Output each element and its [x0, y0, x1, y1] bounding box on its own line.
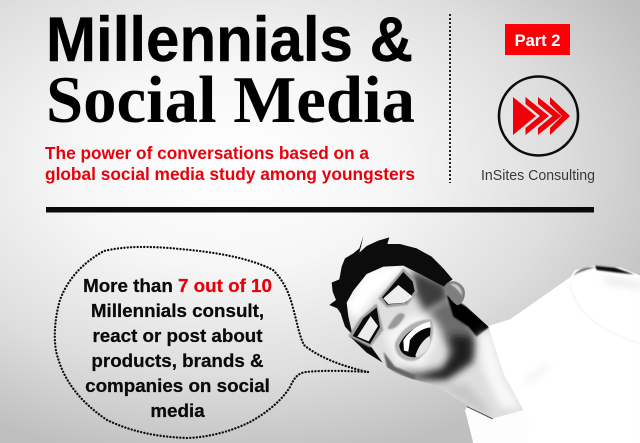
under-jaw dark wedge: [349, 336, 383, 363]
vertical dotted divider: [449, 14, 451, 183]
open mouth: [395, 319, 433, 361]
icon: circle with red chevrons: [499, 76, 578, 156]
horizontal rule: [46, 207, 594, 212]
upper lens reflection: [383, 285, 413, 304]
shirt: [465, 265, 640, 443]
beard along the jaw: [395, 335, 472, 381]
neck shading under the jaw: [442, 380, 489, 416]
bubble text: [83, 275, 272, 421]
cheek highlight: [383, 313, 437, 367]
neck shadow below the ear: [447, 295, 490, 337]
bubble text: Millennials consult,: [91, 300, 264, 321]
lower collar: [466, 407, 530, 443]
subtitle: global social media study among youngsters: [45, 164, 415, 184]
nose shadow: [387, 313, 405, 329]
temple shadow: [412, 270, 448, 312]
subtitle: [45, 143, 415, 184]
hair: [329, 236, 453, 335]
lower lens reflection: [357, 316, 378, 341]
forehead highlight: [347, 266, 406, 320]
bubble text: companies on social: [85, 375, 270, 396]
collar shadow line: [467, 407, 493, 419]
badge: Part 2: [505, 24, 570, 55]
bubble text: media: [150, 400, 205, 421]
sunglasses: [348, 268, 417, 347]
lower lens frame: [348, 303, 383, 347]
lower lens: [353, 307, 380, 344]
head and neck skin: [347, 266, 523, 418]
bubble text: products, brands &: [91, 350, 264, 371]
title: Millennials &: [46, 5, 413, 75]
subtitle: The power of conversations based on a: [45, 143, 369, 163]
bubble text: More than 7 out of 10: [83, 275, 272, 296]
title: [46, 5, 415, 137]
title: Social Media: [46, 63, 415, 137]
logo: InSites Consulting: [481, 76, 595, 184]
badge: Part 2: Part 2: [515, 32, 560, 50]
speech bubble: [55, 247, 368, 438]
person illustration: laughing man with sunglasses: [329, 236, 640, 443]
bubble text: react or post about: [92, 325, 263, 346]
stubble: [428, 298, 477, 373]
upper teeth: [403, 322, 431, 352]
neck highlight near collar: [478, 332, 522, 410]
left jaw stubble: [383, 352, 415, 381]
ear: [444, 281, 465, 305]
upper lens: [382, 272, 415, 305]
logo wordmark: InSites Consulting: [481, 167, 595, 184]
upper lens frame: [378, 268, 417, 307]
tongue: [415, 336, 430, 357]
